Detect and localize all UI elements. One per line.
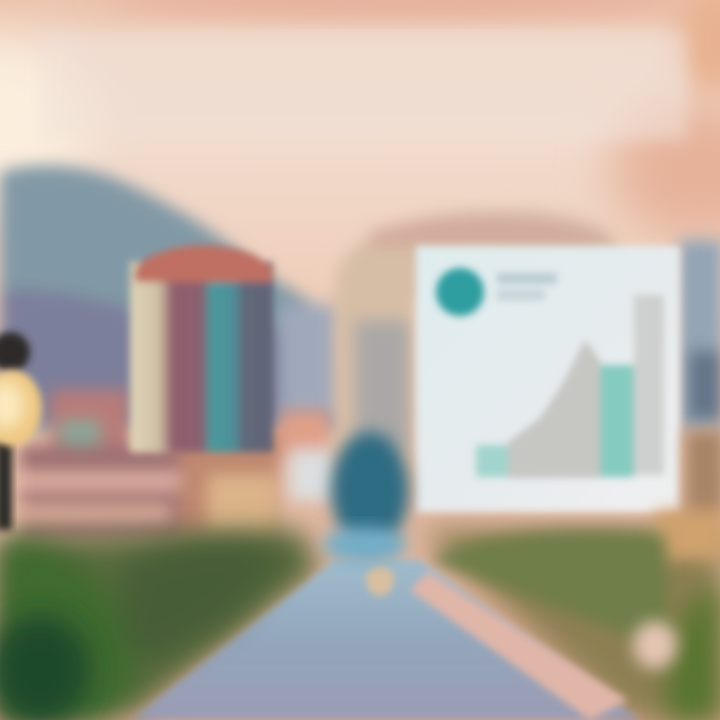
tree line right [430,530,670,650]
far right building [678,240,720,430]
bar chart [476,295,664,478]
low-rise buildings left [20,390,335,540]
trees left [0,541,290,720]
trees right [665,580,720,720]
mountains [0,166,340,430]
legend text placeholder [497,273,557,300]
right-side mid street [655,430,720,560]
ground and hedge bands beside the road [0,530,720,720]
icon: teal circle [436,268,484,316]
round building behind panel [335,210,620,460]
card background [416,246,680,512]
panel: chart card [416,246,680,512]
roadside post [633,621,677,669]
street lamp [0,332,42,530]
central tower [130,245,273,452]
road [130,527,640,720]
translucent title band [42,32,687,140]
teal dome silhouette [331,432,409,548]
